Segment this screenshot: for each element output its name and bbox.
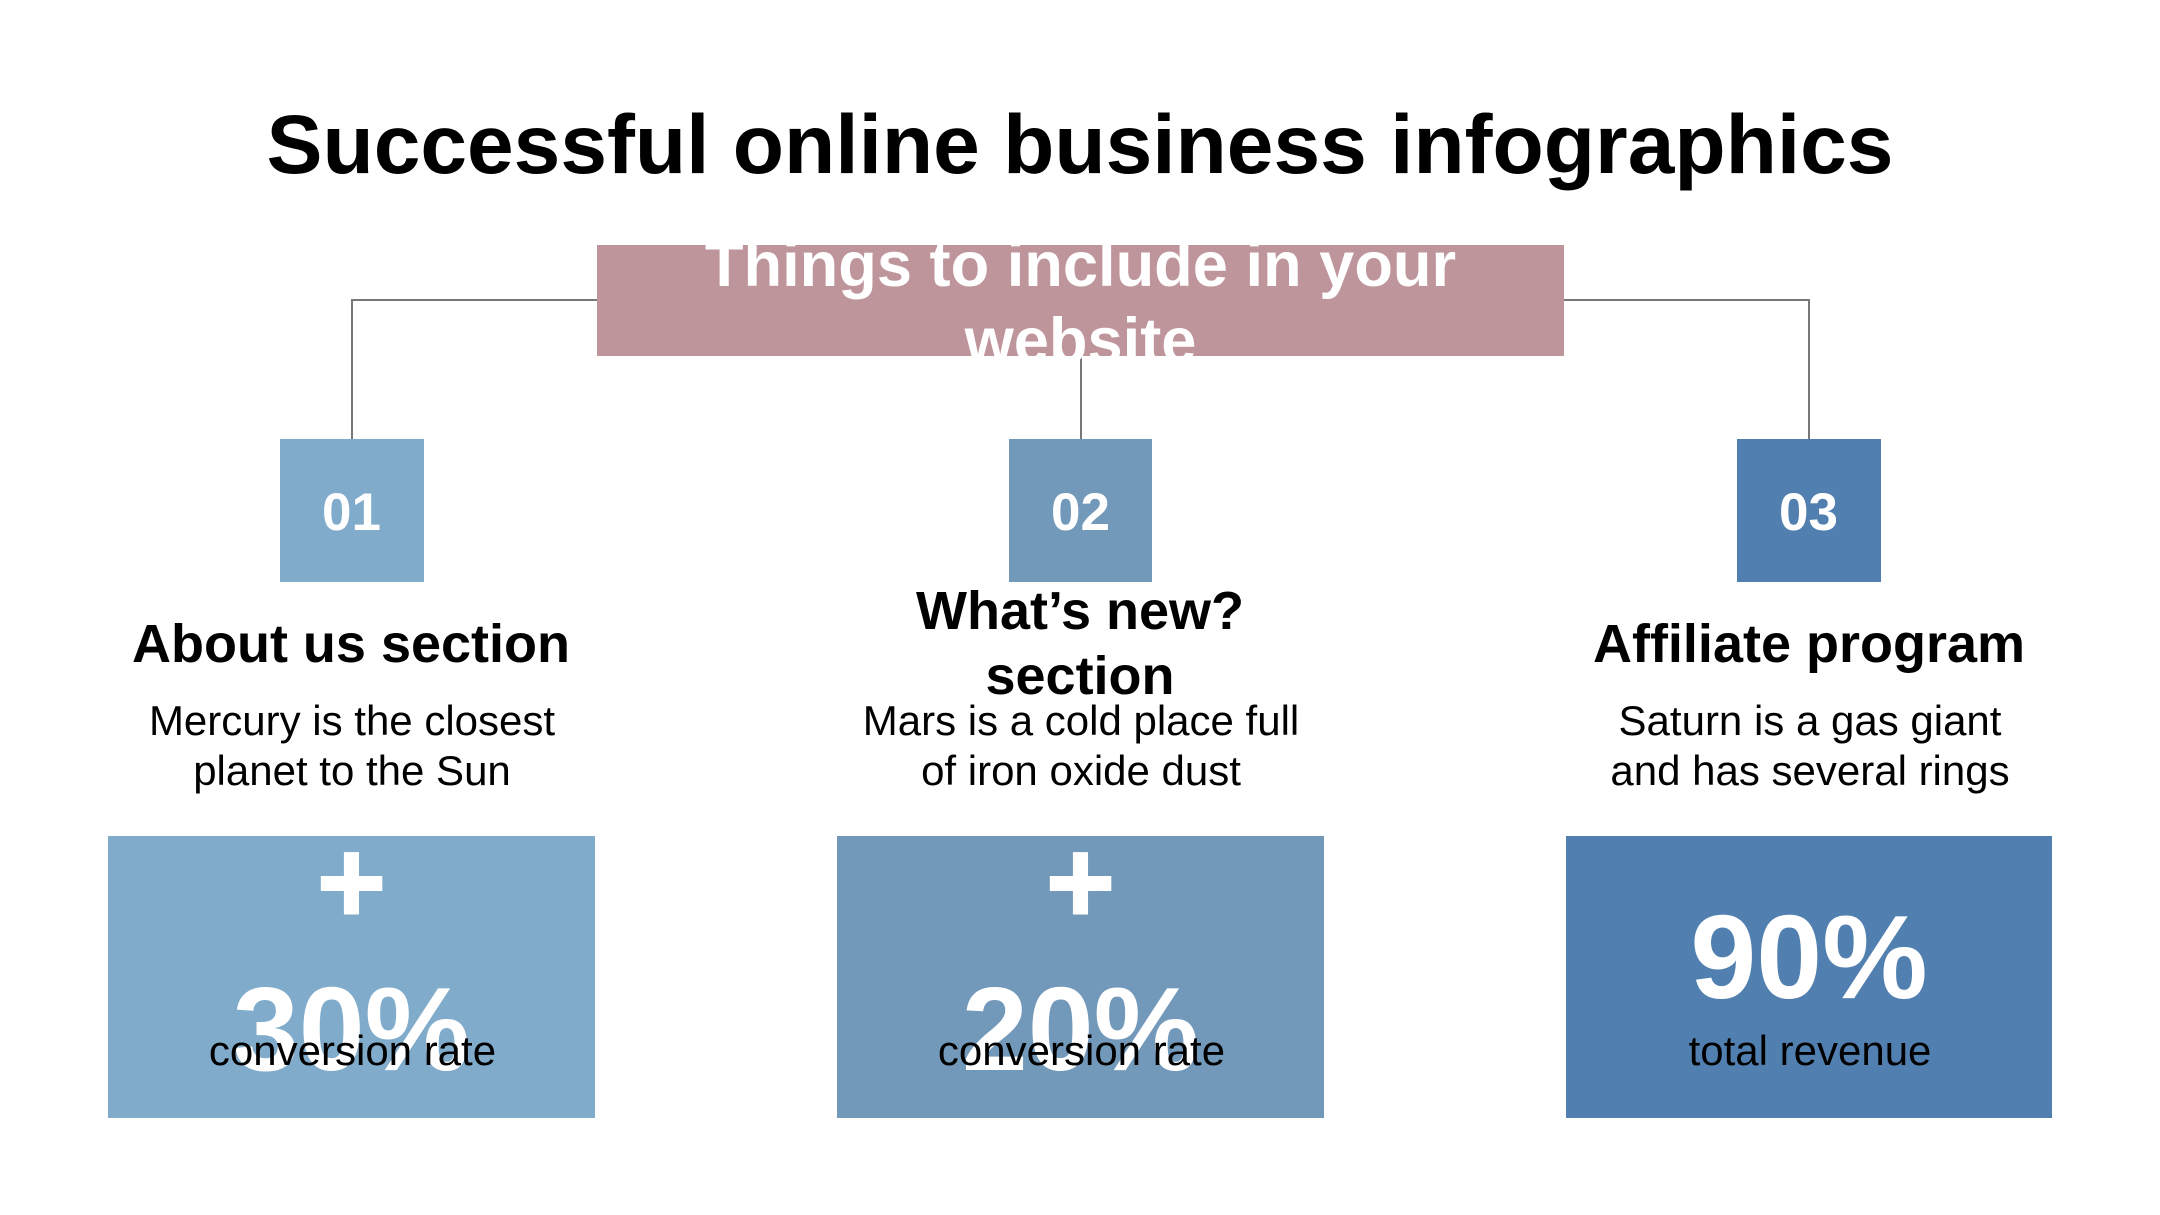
number box 03: 03	[1779, 483, 1838, 542]
heading: What's new? section: What’s new?	[916, 581, 1244, 641]
description: Mars	[863, 697, 1299, 794]
heading: What's new? section: section	[985, 646, 1175, 706]
stat panel: 20% conversion rate	[837, 836, 1324, 1118]
plus sign: +	[1046, 817, 1115, 949]
description: Saturn	[1610, 697, 2010, 794]
number box 01: 01	[322, 483, 381, 542]
value: 90%: 90%	[1690, 892, 1928, 1024]
description: Mercury: planet to the Sun	[193, 747, 511, 794]
stat panel: 30% conversion rate	[108, 836, 595, 1118]
caption: conversion rate	[209, 1027, 496, 1074]
heading: About us section: About us section	[132, 614, 570, 674]
description: Saturn: Saturn is a gas giant	[1619, 697, 2001, 744]
banner text: Things to include in your	[705, 230, 1456, 300]
central banner	[597, 245, 1564, 356]
stat panel: 90% total revenue	[1566, 836, 2052, 1118]
caption: total revenue	[1689, 1027, 1931, 1074]
connector lines	[351, 299, 1810, 439]
number box 03	[1737, 439, 1881, 582]
description: Mars: Mars is a cold place full	[863, 697, 1299, 744]
plus sign: +	[317, 817, 386, 949]
number box 02	[1009, 439, 1152, 582]
description: Mercury: Mercury is the closest	[149, 697, 555, 744]
heading: Affiliate program: Affiliate program	[1593, 614, 2025, 674]
value: 20%: 20%	[962, 964, 1199, 1096]
description: Mercury	[149, 697, 555, 794]
description: Saturn: and has several rings	[1610, 747, 2010, 794]
heading: What's new? section	[916, 581, 1244, 706]
number box 01	[280, 439, 424, 582]
value: 30%: 30%	[233, 964, 470, 1096]
banner text	[705, 230, 1456, 376]
description: Mars: of iron oxide dust	[921, 747, 1241, 794]
title: Successful online business infographics	[267, 97, 1893, 191]
banner text: website	[965, 306, 1196, 376]
number box 02: 02	[1051, 483, 1110, 542]
caption: conversion rate	[938, 1027, 1225, 1074]
